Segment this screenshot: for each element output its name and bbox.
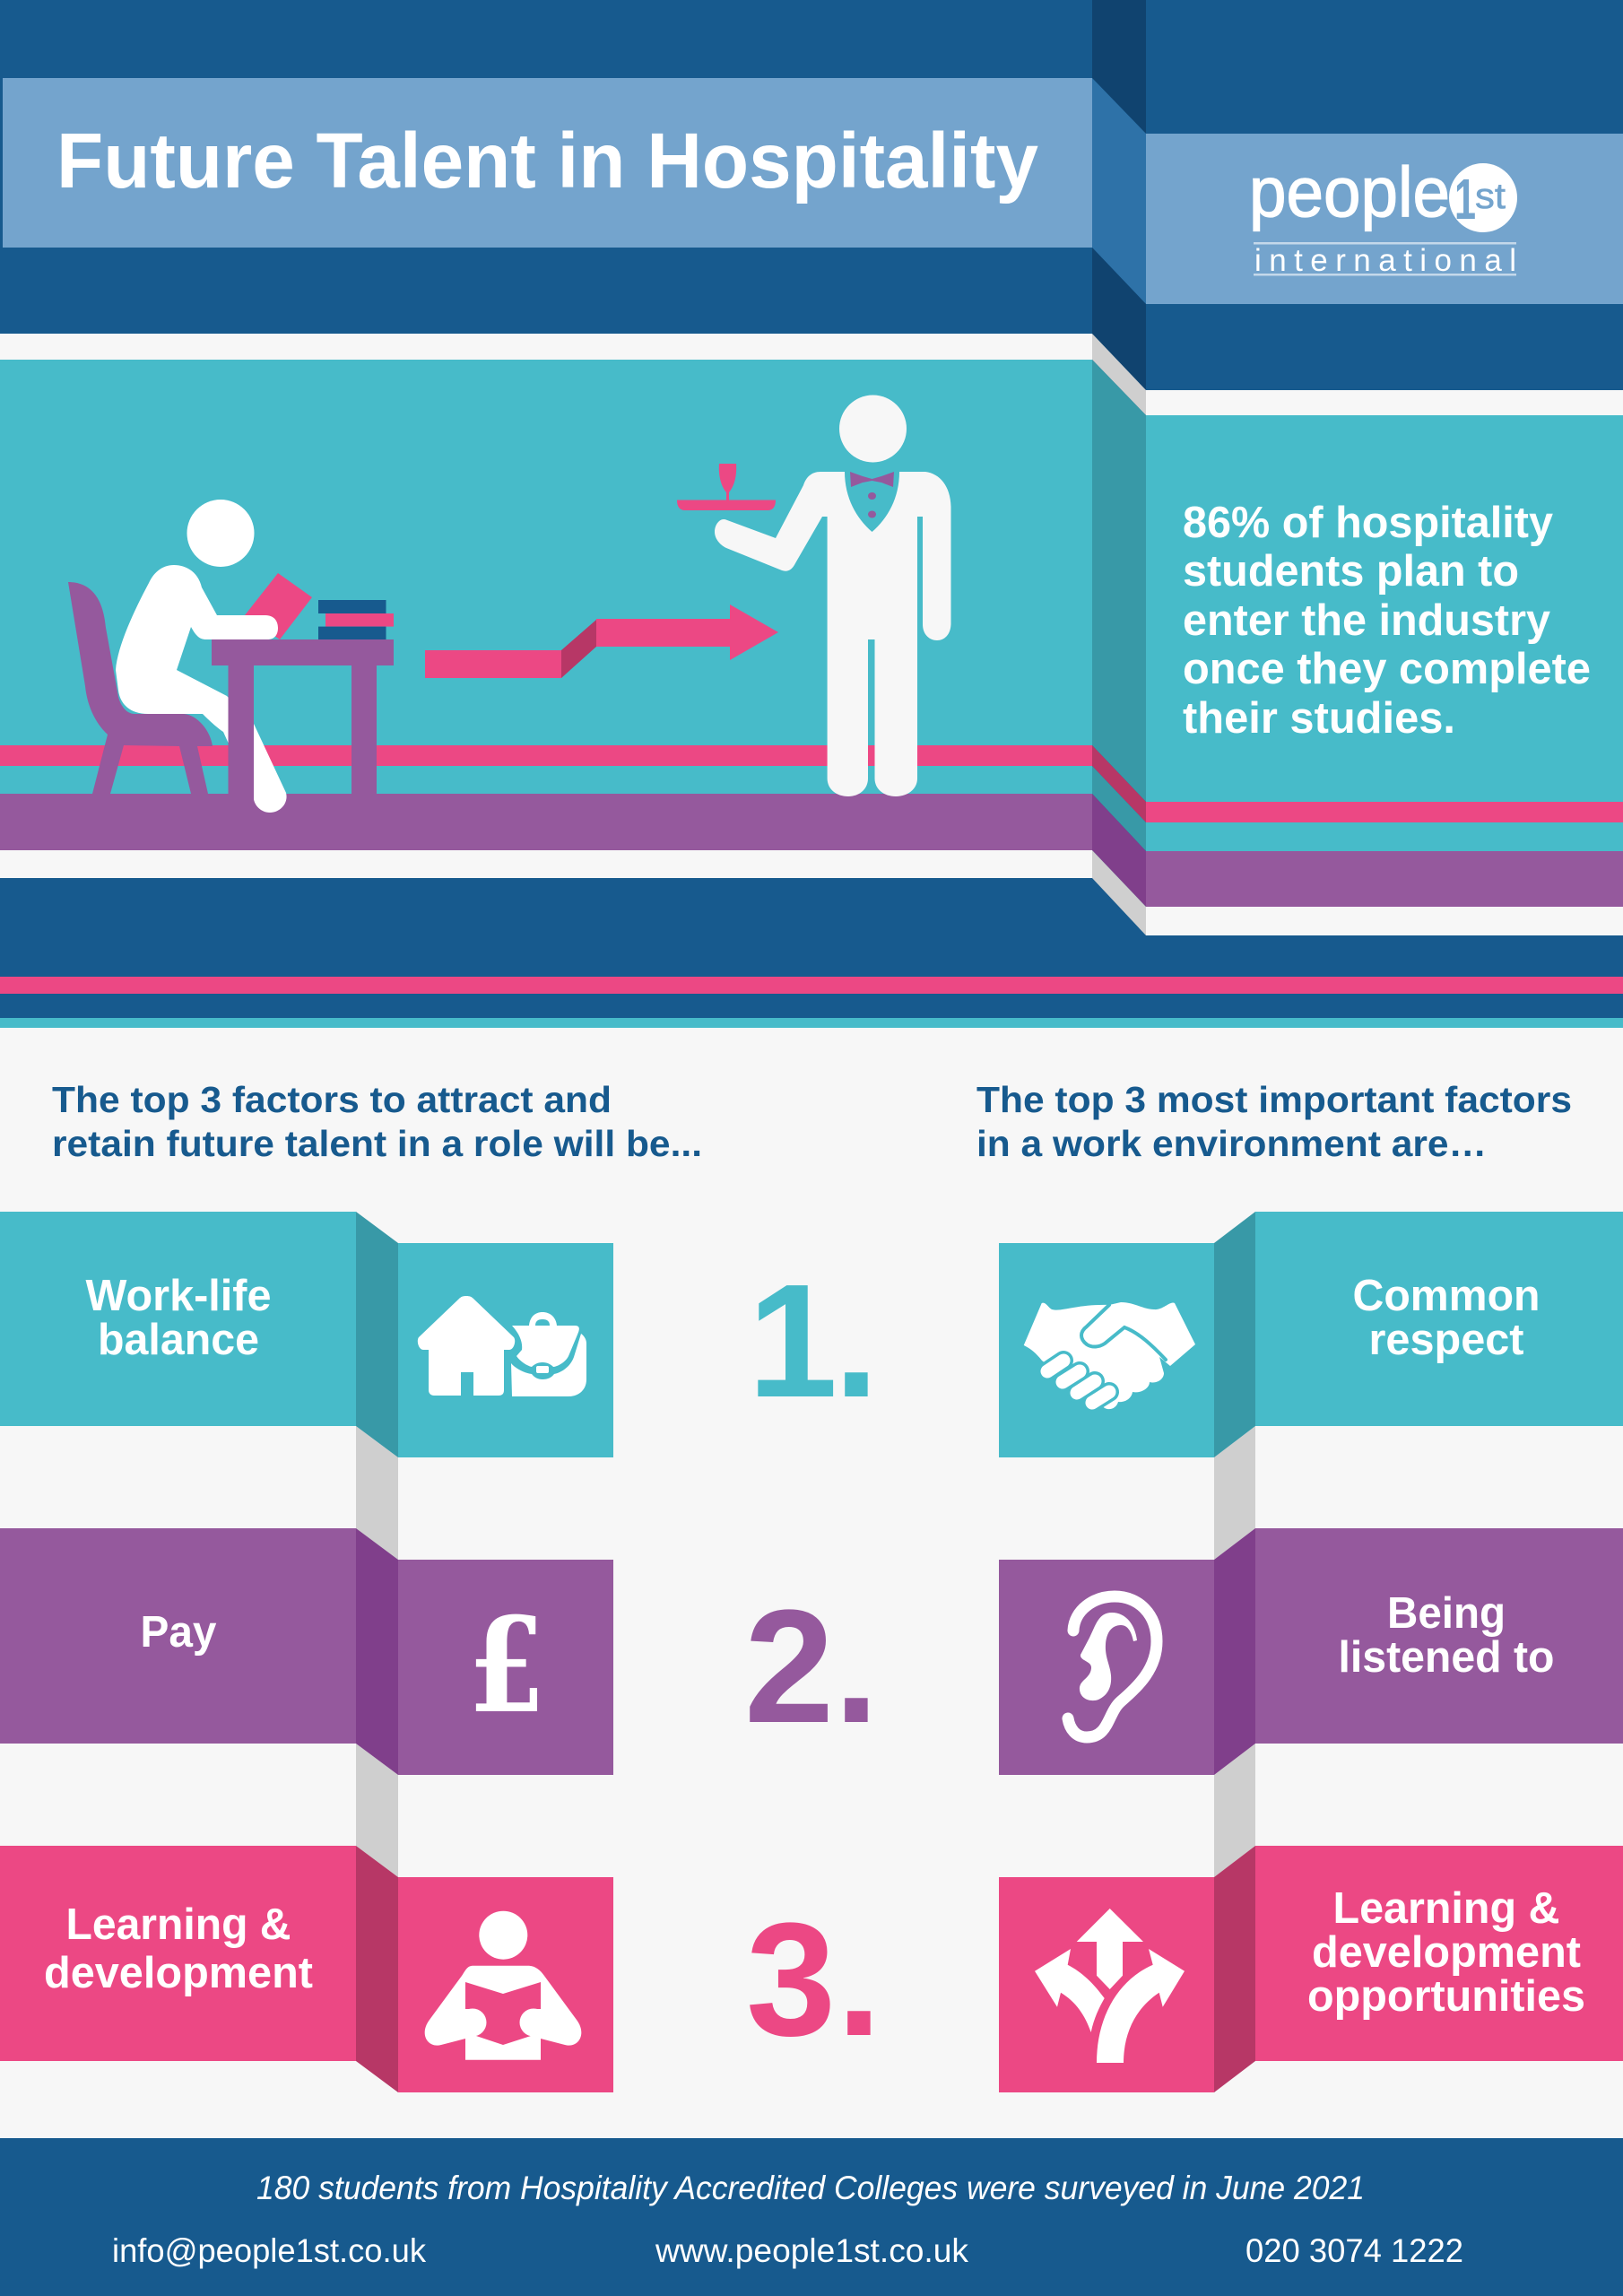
statistic text: their studies. <box>1183 694 1455 743</box>
chair <box>68 582 213 794</box>
waistcoat opening <box>845 472 899 532</box>
buttons <box>868 492 876 518</box>
heading: role factors <box>52 1079 702 1164</box>
panel: left factor 3 learning and development <box>0 1846 613 2092</box>
number 2: . <box>834 1577 879 1757</box>
number 1: . <box>834 1251 879 1431</box>
label <box>1338 1589 1555 1682</box>
tray and glass <box>677 464 776 510</box>
label <box>1307 1884 1585 2021</box>
label: Work-life <box>86 1272 271 1320</box>
number 3: 3 <box>746 1890 836 2070</box>
connector strips <box>356 1426 1255 1877</box>
icon: handshake <box>1024 1302 1195 1409</box>
logo: people 1st international: st <box>1475 177 1506 216</box>
heading: work environment factors <box>976 1079 1572 1164</box>
heading: role factors: retain future talent in a role will be... <box>52 1123 702 1164</box>
logo panel <box>1146 134 1623 304</box>
heading: work environment factors: The top 3 most important factors <box>976 1079 1572 1120</box>
label: Learning & <box>1332 1884 1560 1933</box>
panel: right factor 1 common respect <box>999 1212 1623 1457</box>
icon: three direction arrows <box>1035 1909 1185 2063</box>
icon: waiter with tray <box>677 395 950 796</box>
label <box>86 1272 271 1364</box>
contact email: info@people1st.co.uk <box>112 2232 426 2269</box>
label: Common <box>1352 1272 1541 1320</box>
panel: right factor 3 learning and development opportunities <box>999 1846 1623 2092</box>
header panel background <box>0 0 1623 977</box>
panel: left factor 2 pay <box>0 1528 613 1775</box>
survey note: 180 students from Hospitality Accredited Colleges were surveyed in June 2021 <box>256 2170 1365 2206</box>
icon: pound sign: £ <box>468 1589 545 1743</box>
heading: work environment factors: in a work environment are… <box>976 1123 1487 1164</box>
logo: people 1st international: people <box>1249 152 1450 231</box>
contact phone: 020 3074 1222 <box>1245 2232 1463 2269</box>
label: Being <box>1387 1589 1506 1638</box>
desk <box>212 639 394 809</box>
logo: people 1st international <box>1249 152 1517 278</box>
pink and blue stripes <box>0 977 1623 1028</box>
stack of books <box>318 600 394 639</box>
statistic text: students plan to <box>1183 547 1519 596</box>
bow tie <box>850 472 894 487</box>
number 2: 2 <box>744 1577 834 1757</box>
logo: people 1st international: international <box>1254 243 1516 278</box>
contact website: www.people1st.co.uk <box>655 2232 968 2269</box>
fold column between left and right panels <box>1092 0 1146 935</box>
label: Pay <box>140 1608 217 1657</box>
label: development <box>44 1949 313 1997</box>
statistic text: enter the industry <box>1183 596 1550 645</box>
icon: house and briefcase <box>418 1296 586 1396</box>
statistic panel <box>1146 390 1623 935</box>
waiter body <box>715 472 950 796</box>
icon: person reading book <box>425 1911 581 2060</box>
label: balance <box>98 1316 259 1364</box>
statistic text: once they complete <box>1183 645 1591 693</box>
label: Learning & <box>66 1900 291 1949</box>
label: opportunities <box>1307 1972 1585 2021</box>
panel: right factor 2 being listened to <box>999 1528 1623 1775</box>
label <box>44 1900 313 1997</box>
icon: student reading at desk <box>68 500 394 813</box>
statistic text: 86% of hospitality <box>1183 499 1553 547</box>
arrow from student to waiter <box>425 604 778 678</box>
logo: people 1st international: 1 <box>1454 167 1476 231</box>
book being read <box>245 573 312 639</box>
scene panel stripes <box>0 334 1092 878</box>
waiter head <box>839 395 907 463</box>
label: listened to <box>1338 1633 1555 1682</box>
title: Future Talent in Hospitality <box>56 117 1038 204</box>
label <box>1352 1272 1541 1364</box>
number 3: . <box>837 1890 881 2070</box>
label: development <box>1312 1928 1581 1977</box>
label: respect <box>1368 1316 1524 1364</box>
title banner <box>3 78 1092 248</box>
heading: role factors: The top 3 factors to attract and <box>52 1079 612 1120</box>
student figure <box>116 500 287 813</box>
number 1: 1 <box>748 1251 838 1431</box>
statistic text <box>1183 499 1591 743</box>
panel: left factor 1 work-life balance <box>0 1212 613 1457</box>
icon: ear <box>1068 1596 1157 1737</box>
footer panel <box>0 2138 1623 2296</box>
